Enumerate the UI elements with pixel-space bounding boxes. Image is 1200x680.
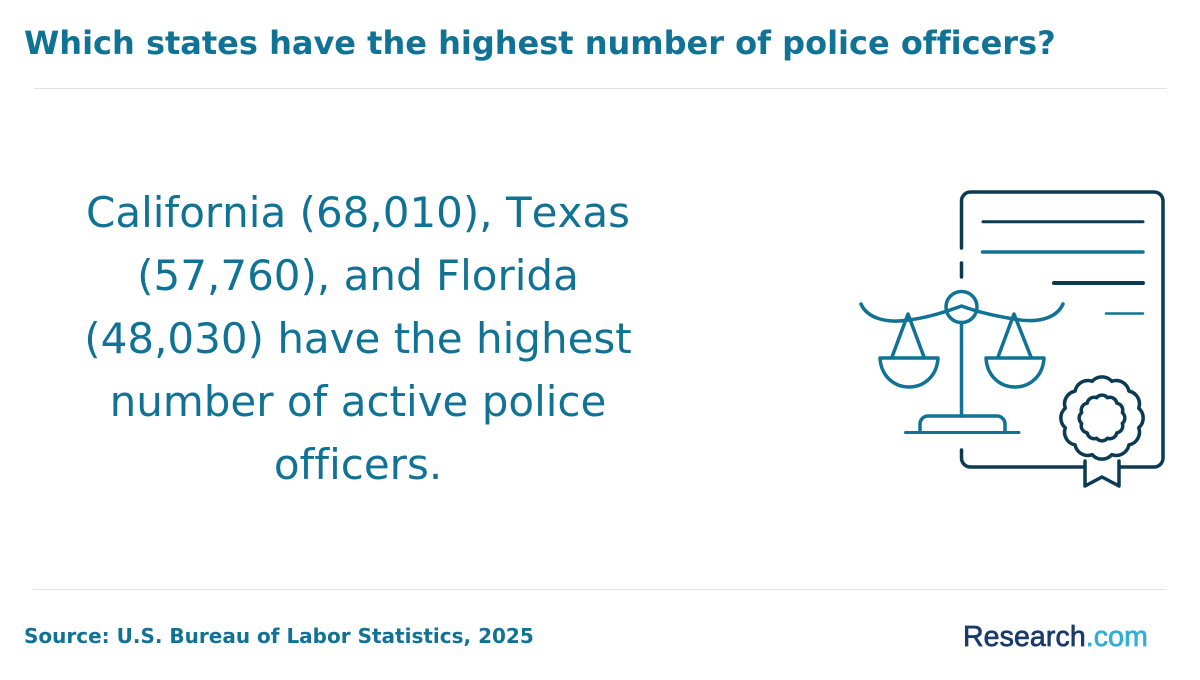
logo: Research.com: Research.com bbox=[963, 621, 1148, 653]
main statement text: number of active police bbox=[110, 377, 606, 426]
icon: rosette seal with ribbon bbox=[1061, 377, 1143, 486]
icon: certificate document bbox=[962, 192, 1163, 467]
main statement text: California (68,010), Texas bbox=[86, 188, 630, 237]
main statement text: (48,030) have the highest bbox=[84, 314, 632, 363]
source note: Source: U.S. Bureau of Labor Statistics, 2025 bbox=[24, 624, 534, 648]
main statement text: officers. bbox=[274, 440, 442, 489]
title: Which states have the highest number of police officers? bbox=[24, 24, 1056, 62]
main statement text: (57,760), and Florida bbox=[137, 251, 579, 300]
main statement text bbox=[84, 188, 632, 489]
icon: scales of justice bbox=[861, 292, 1063, 432]
